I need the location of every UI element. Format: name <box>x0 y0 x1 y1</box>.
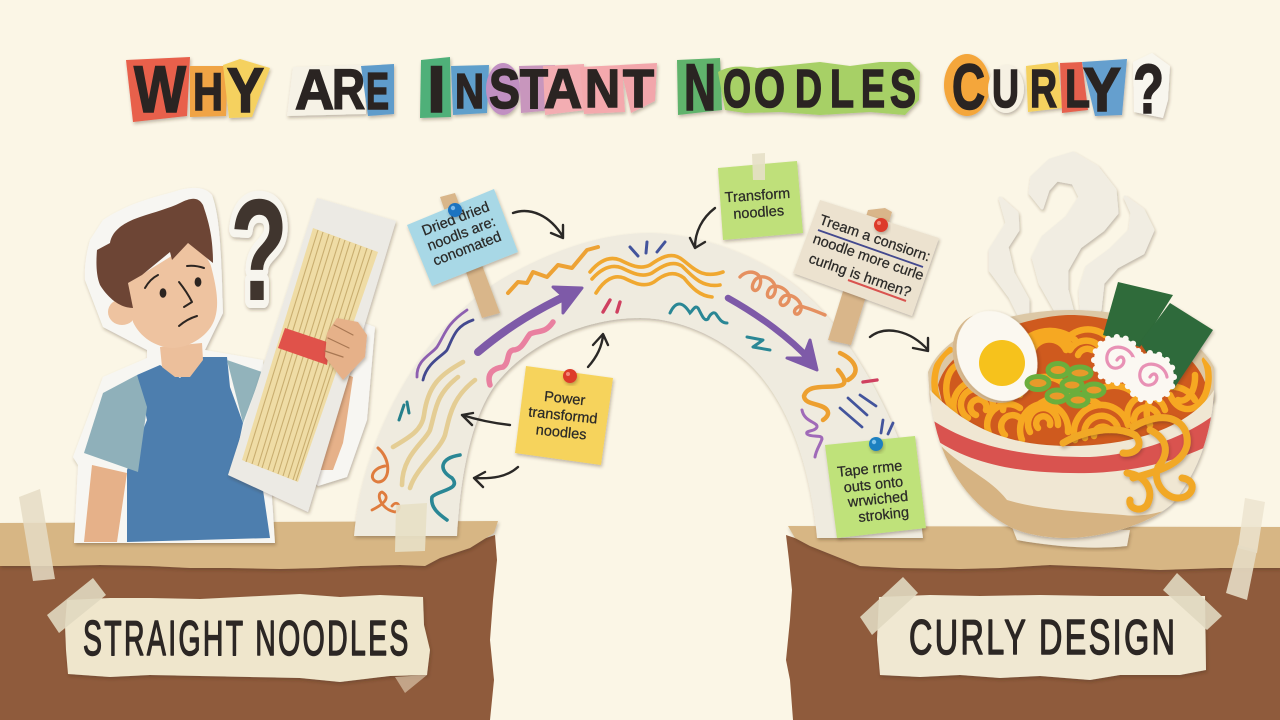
doodles left side <box>372 247 598 520</box>
purple arrow left <box>478 287 582 352</box>
sign underlines <box>818 230 923 267</box>
note text <box>526 388 600 444</box>
purple arrow right <box>728 298 817 370</box>
narutomaki right <box>1126 353 1174 401</box>
forearm <box>300 370 353 470</box>
doodles centre and right <box>603 242 893 457</box>
steam wisp right <box>1080 197 1153 320</box>
note: tape strokes <box>825 436 926 538</box>
bowl interior <box>928 310 1214 450</box>
title: E <box>861 59 885 119</box>
noodle spirals <box>934 329 1209 442</box>
arrow: yellow note to noodles <box>462 413 510 425</box>
red pin <box>563 369 577 383</box>
title: N <box>585 59 620 119</box>
title: T <box>520 57 548 120</box>
hanging noodle curls <box>1063 418 1192 509</box>
tape: right ledge upper <box>1238 498 1265 553</box>
pack wrapper <box>228 198 396 512</box>
hair <box>96 199 213 308</box>
sign stick right <box>828 208 892 345</box>
blue pin on note <box>869 437 883 451</box>
note text: noodles <box>535 422 587 444</box>
title: U <box>992 59 1019 119</box>
title: N <box>455 65 484 119</box>
title paper tiles <box>126 53 1170 122</box>
note: dried noodles <box>407 189 518 286</box>
orange centre waves <box>590 256 723 297</box>
curved paper arch <box>354 233 923 538</box>
title: A <box>544 57 582 120</box>
left arm <box>84 465 127 542</box>
note text: Power <box>543 389 586 409</box>
noodle strands <box>246 230 372 481</box>
note text: wrwiched <box>846 489 909 511</box>
note text: outs onto <box>843 474 904 496</box>
left ledge <box>0 521 498 720</box>
note: cream sign <box>793 200 939 316</box>
label text: STRAIGHT NOODLES <box>83 612 408 666</box>
title: S <box>489 57 520 120</box>
left sleeve <box>84 375 147 472</box>
arrow: yellow note up <box>588 334 608 367</box>
title: N <box>684 50 716 124</box>
sign stick left <box>440 193 500 318</box>
arrow: sign to bowl <box>870 331 928 351</box>
face <box>128 243 217 348</box>
question mark: ? <box>230 169 288 331</box>
sign text: noodle more curle <box>811 231 926 284</box>
sign text <box>804 212 932 303</box>
tape: straight label bottom <box>395 675 427 693</box>
note text: conomated <box>431 229 504 270</box>
title: ? <box>1133 50 1164 128</box>
eyes and expression <box>145 266 204 326</box>
title: R <box>332 58 365 122</box>
arrow: green note to arch <box>690 208 715 248</box>
arrow: blue note to arch <box>513 211 563 238</box>
note text: transformd <box>528 404 598 428</box>
soft boiled egg <box>937 296 1053 418</box>
arm border <box>300 310 375 486</box>
note text: Tape rrme <box>837 458 903 481</box>
title: T <box>623 59 654 119</box>
blue pin <box>448 203 462 217</box>
label: straight noodles <box>65 594 430 682</box>
title: Y <box>227 56 264 126</box>
title: S <box>890 59 916 119</box>
red band <box>278 328 330 365</box>
note text <box>724 186 792 223</box>
label text: CURLY DESIGN <box>909 609 1175 665</box>
tape: straight label top <box>47 578 106 633</box>
note text: noodls are: <box>425 214 498 255</box>
label: curly design <box>877 595 1206 680</box>
title: L <box>830 59 854 119</box>
title: O <box>754 59 785 119</box>
title <box>126 50 1170 128</box>
note text <box>837 458 911 528</box>
tape on arch foot <box>395 503 427 552</box>
steam wisp middle <box>1030 153 1117 313</box>
note text <box>419 199 504 270</box>
title: H <box>193 63 223 122</box>
ear <box>108 299 136 325</box>
title: R <box>1030 59 1057 119</box>
title: D <box>795 59 822 119</box>
bowl body <box>930 390 1214 538</box>
right ledge <box>786 526 1280 720</box>
title: A <box>295 58 334 122</box>
note: transform noodles <box>718 161 803 240</box>
note text: noodles <box>733 203 785 223</box>
nori sheets <box>1103 282 1213 390</box>
note text: Transform <box>724 186 791 206</box>
ramen bowl <box>925 282 1220 560</box>
arrow: yellow note to squiggle <box>474 467 518 487</box>
steam wisp left <box>990 198 1028 320</box>
shirt <box>127 357 270 542</box>
title: O <box>723 59 751 119</box>
paper cutout border <box>73 188 275 543</box>
tape on green note <box>752 153 765 180</box>
narutomaki left <box>1094 337 1140 383</box>
title: C <box>952 51 985 123</box>
title: E <box>366 63 389 121</box>
title: I <box>427 52 446 126</box>
tape: right ledge lower <box>1226 545 1257 600</box>
tape: curly label right <box>1163 573 1222 630</box>
right sleeve <box>227 360 262 423</box>
neck <box>160 343 203 377</box>
note text: Dried dried <box>420 199 492 240</box>
note text: stroking <box>858 505 910 526</box>
tape: left ledge <box>19 489 55 581</box>
person holding straight noodles <box>73 188 375 543</box>
bowl foot <box>1012 527 1130 548</box>
sign text: Tream a consiorn: <box>817 212 932 265</box>
hand <box>325 318 367 380</box>
noodles bundle <box>242 228 378 482</box>
red pin on sign <box>874 218 888 232</box>
title: L <box>1065 59 1090 119</box>
title: Y <box>1083 56 1121 125</box>
sign text: curlng is hrmen? <box>807 251 913 301</box>
note: power transformed noodles <box>515 366 613 465</box>
noodle pack <box>228 198 396 512</box>
bowl decoration <box>934 417 1211 538</box>
scallion rings <box>1027 364 1104 406</box>
tape: curly label left <box>860 577 918 635</box>
title: W <box>134 52 187 126</box>
steam <box>990 153 1153 320</box>
